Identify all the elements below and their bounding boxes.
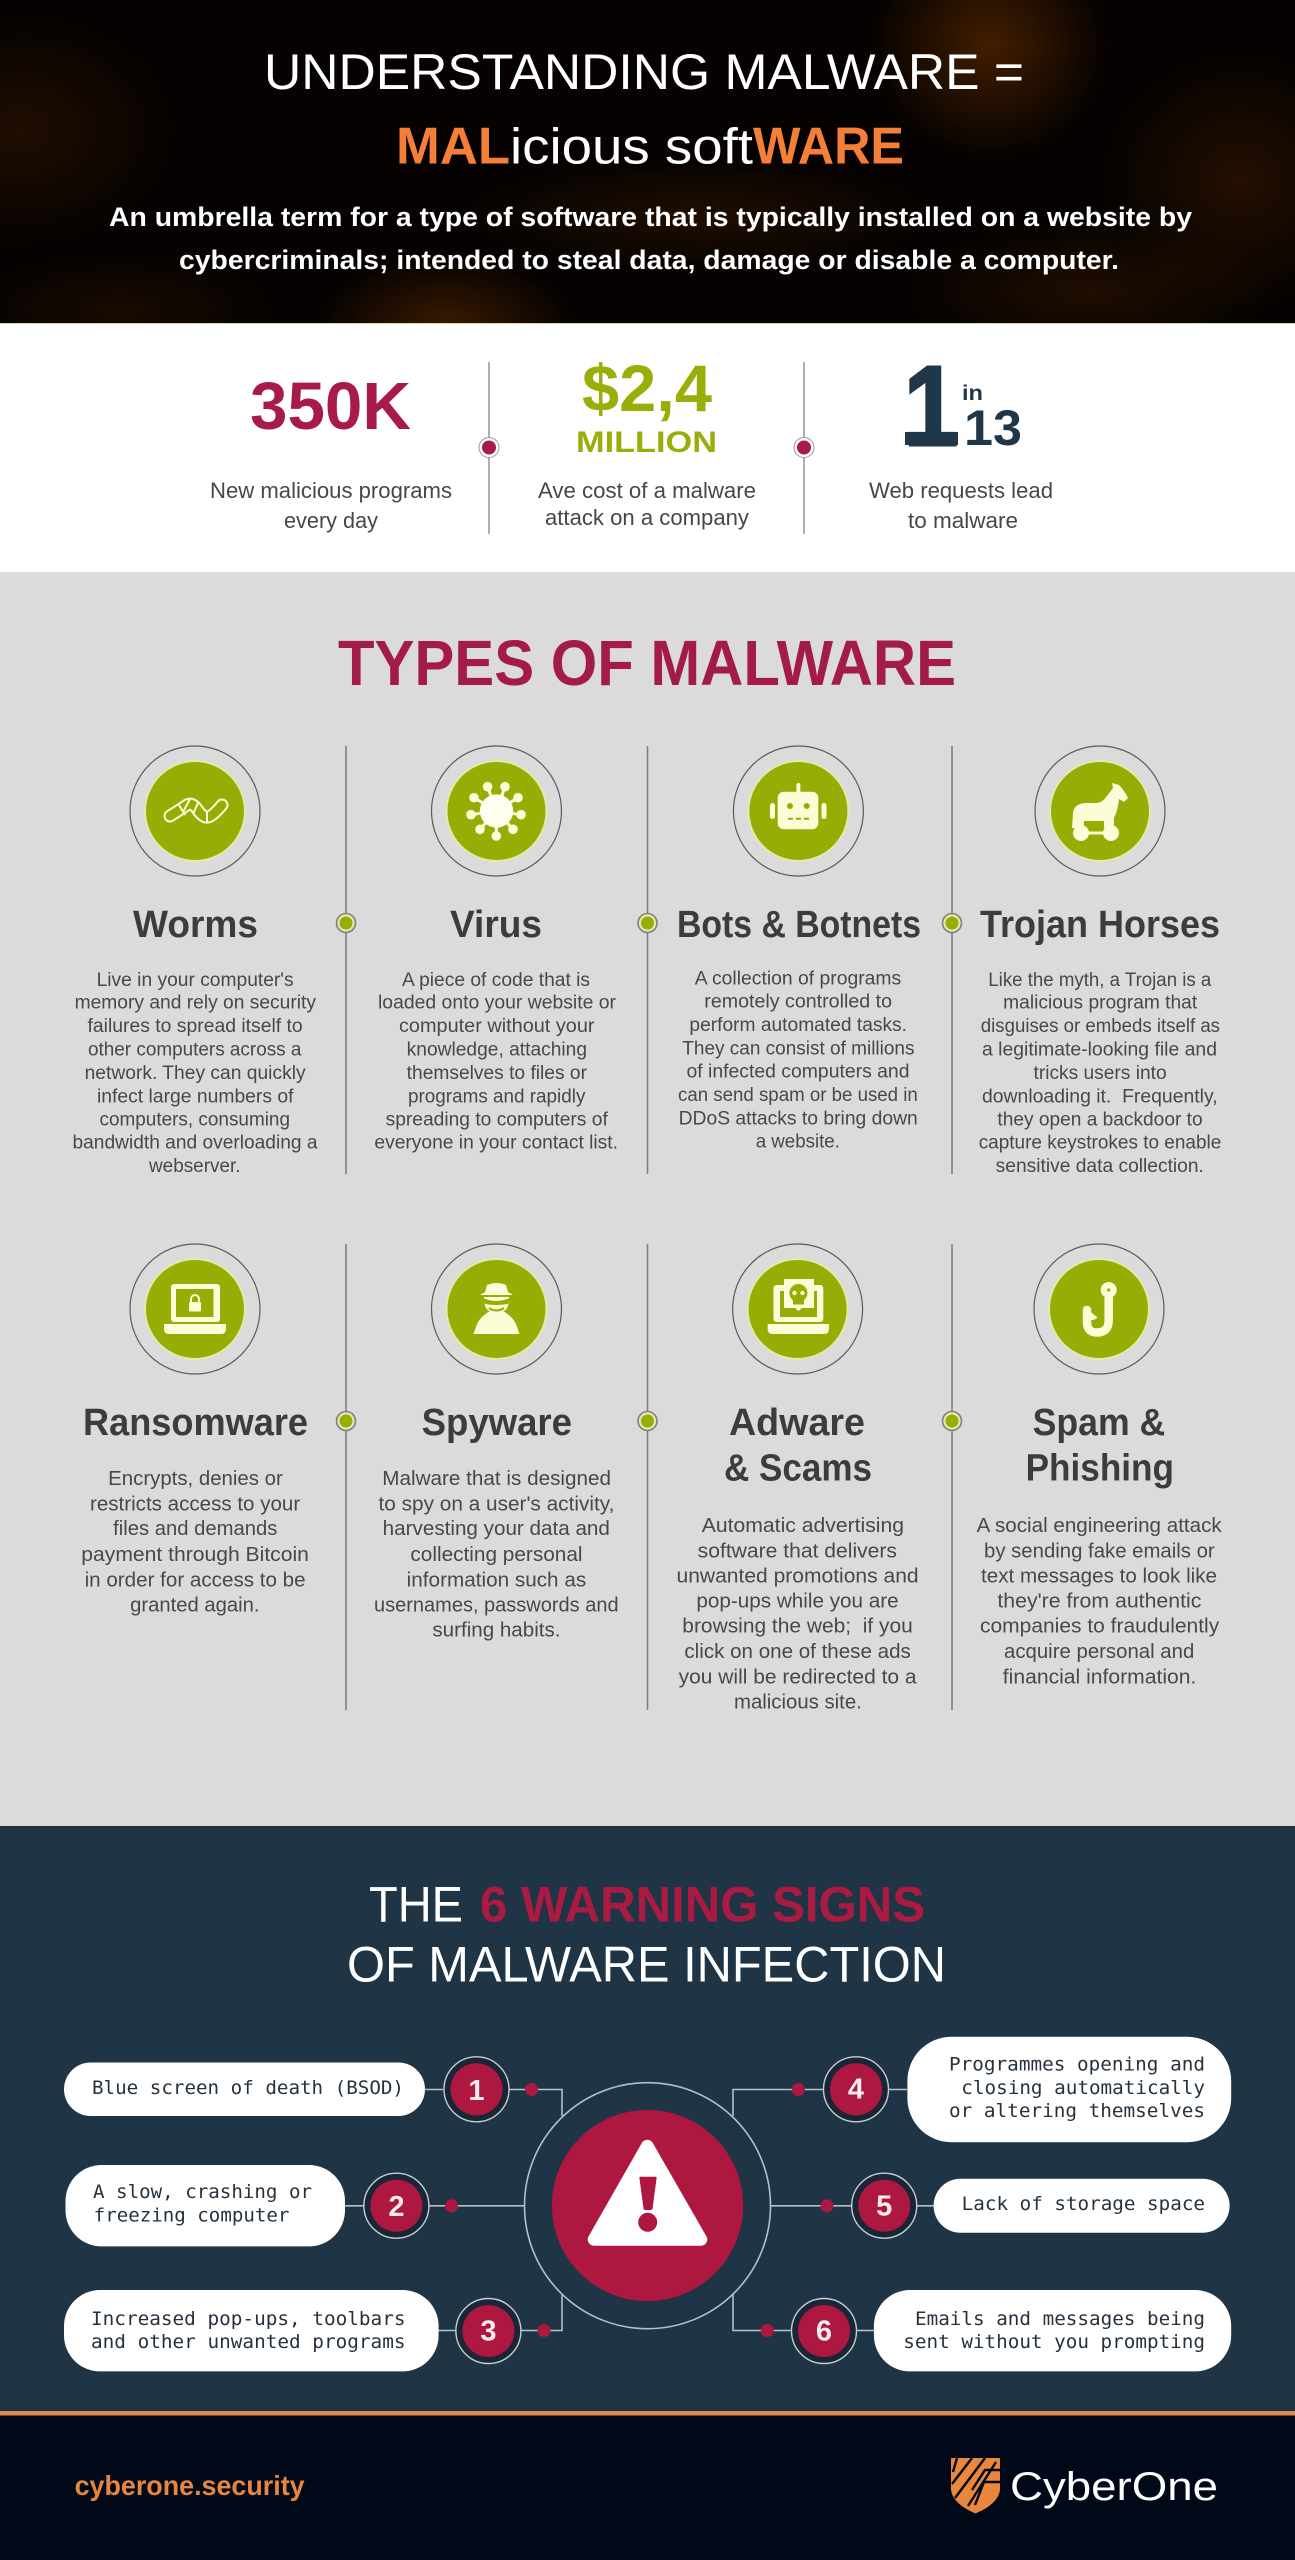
footer panel bbox=[0, 2411, 1295, 2560]
description: collecting personal bbox=[410, 1544, 582, 1566]
description: usernames, passwords and bbox=[374, 1595, 619, 1617]
types of malware panel bbox=[0, 572, 1295, 1826]
warning sign 3: 3 bbox=[480, 2315, 496, 2347]
card: trojan horses bbox=[979, 746, 1221, 1177]
description: they're from authentic bbox=[997, 1590, 1201, 1612]
description: DDoS attacks to bring down bbox=[679, 1108, 918, 1129]
description: memory and rely on security bbox=[75, 993, 316, 1014]
header panel bbox=[0, 0, 1295, 395]
subtitle bbox=[109, 202, 1192, 275]
description: can send spam or be used in bbox=[678, 1085, 918, 1106]
description: software that delivers bbox=[698, 1540, 897, 1562]
heading: Phishing bbox=[1026, 1448, 1174, 1490]
description: They can consist of millions bbox=[682, 1038, 914, 1059]
description: other computers across a bbox=[88, 1039, 302, 1060]
card: bots and botnets bbox=[677, 746, 921, 1153]
icon: spy bbox=[432, 1244, 562, 1374]
description: computer without your bbox=[399, 1016, 595, 1037]
stat divider 1 bbox=[479, 362, 499, 534]
description: financial information. bbox=[1003, 1666, 1196, 1688]
warning sign 5: Lack of storage space bbox=[962, 2193, 1205, 2215]
heading: Worms bbox=[133, 904, 258, 946]
heading: Ransomware bbox=[83, 1402, 308, 1444]
description: tricks users into bbox=[1034, 1063, 1167, 1084]
title line 2: MAL bbox=[396, 118, 510, 176]
description: network. They can quickly bbox=[85, 1063, 306, 1084]
description: a legitimate-looking file and bbox=[982, 1039, 1217, 1060]
stat divider 2 bbox=[794, 362, 814, 534]
warning sign 3 bbox=[64, 2290, 550, 2371]
stat: 350K: 350K bbox=[250, 369, 411, 444]
icon: locked laptop bbox=[130, 1244, 260, 1374]
section heading: TYPES OF MALWARE bbox=[338, 627, 956, 699]
description: acquire personal and bbox=[1004, 1641, 1194, 1663]
description: browsing the web; if you bbox=[682, 1616, 913, 1638]
description: sensitive data collection. bbox=[996, 1156, 1204, 1177]
description: Like the myth, a Trojan is a bbox=[988, 970, 1212, 991]
warning sign 4: Programmes opening and bbox=[949, 2054, 1205, 2076]
description: information such as bbox=[407, 1569, 586, 1591]
icon: virus bbox=[432, 746, 562, 876]
description: of infected computers and bbox=[686, 1062, 910, 1083]
icon: fish hook bbox=[1034, 1244, 1164, 1374]
section heading: 6 WARNING SIGNS bbox=[480, 1876, 925, 1932]
subtitle: cybercriminals; intended to steal data, damage or disable a computer. bbox=[179, 245, 1119, 275]
description: downloading it. Frequently, bbox=[982, 1086, 1218, 1107]
card: worms bbox=[72, 746, 318, 1177]
description: disguises or embeds itself as bbox=[981, 1016, 1220, 1037]
description: loaded onto your website or bbox=[378, 993, 617, 1014]
stat: $2,4 million: attack on a company bbox=[545, 505, 749, 530]
description: harvesting your data and bbox=[383, 1518, 610, 1540]
card: adware and scams bbox=[676, 1244, 919, 1714]
description: capture keystrokes to enable bbox=[979, 1133, 1221, 1154]
warning sign 1: Blue screen of death (BSOD) bbox=[92, 2077, 404, 2099]
warning sign 6: Emails and messages being bbox=[915, 2308, 1205, 2330]
description: by sending fake emails or bbox=[984, 1540, 1215, 1562]
description: bandwidth and overloading a bbox=[72, 1133, 318, 1154]
description: computers, consuming bbox=[100, 1109, 290, 1130]
warning sign 6: 6 bbox=[816, 2315, 832, 2347]
description: malicious site. bbox=[734, 1692, 862, 1714]
section heading: OF MALWARE INFECTION bbox=[347, 1937, 946, 1993]
warning sign 1: 1 bbox=[468, 2075, 485, 2107]
description bbox=[678, 968, 918, 1153]
description bbox=[676, 1515, 919, 1714]
icon: skull laptop bbox=[733, 1244, 863, 1374]
description: Live in your computer's bbox=[97, 970, 294, 991]
card: spam and phishing bbox=[977, 1244, 1223, 1688]
stat: 1 in 13: 1 bbox=[904, 343, 958, 469]
description bbox=[374, 1468, 619, 1641]
title line 2 bbox=[396, 118, 904, 176]
warning sign 1 bbox=[64, 2057, 538, 2122]
warning sign 6 bbox=[761, 2290, 1231, 2371]
description: knowledge, attaching bbox=[407, 1039, 587, 1060]
description: click on one of these ads bbox=[684, 1641, 911, 1663]
dividers row 2 bbox=[336, 1244, 962, 1710]
description: files and demands bbox=[113, 1518, 277, 1540]
title line 1: UNDERSTANDING MALWARE = bbox=[264, 44, 1024, 100]
stat: $2,4 million: MILLION bbox=[576, 426, 717, 459]
warning sign 2 bbox=[66, 2165, 458, 2246]
stat: 350K: every day bbox=[284, 508, 378, 533]
description bbox=[374, 970, 618, 1154]
warning sign 4 bbox=[792, 2037, 1231, 2142]
warning sign 2: freezing computer bbox=[94, 2205, 289, 2227]
description bbox=[72, 970, 318, 1177]
description: programs and rapidly bbox=[408, 1086, 586, 1107]
dividers row 1 bbox=[336, 746, 962, 1174]
warning sign 3: Increased pop-ups, toolbars bbox=[91, 2308, 406, 2330]
description: pop-ups while you are bbox=[696, 1590, 899, 1612]
logo: CyberOne: CyberOne bbox=[1010, 2465, 1218, 2509]
description: everyone in your contact list. bbox=[374, 1133, 618, 1154]
description: restricts access to your bbox=[90, 1493, 301, 1515]
warning sign 4: 4 bbox=[848, 2074, 864, 2106]
description bbox=[979, 970, 1221, 1177]
description: themselves to files or bbox=[407, 1063, 588, 1084]
description: in order for access to be bbox=[85, 1569, 306, 1591]
stat: 1 in 13 bbox=[869, 343, 1053, 533]
card: spyware bbox=[374, 1244, 619, 1641]
heading: Spyware bbox=[422, 1402, 572, 1444]
title line 2: WARE bbox=[753, 118, 904, 176]
heading: Adware bbox=[729, 1402, 865, 1444]
description: spreading to computers of bbox=[386, 1109, 609, 1130]
warning sign 2: A slow, crashing or bbox=[93, 2181, 312, 2203]
heading: Virus bbox=[450, 904, 542, 946]
section heading bbox=[347, 1876, 946, 1993]
heading: & Scams bbox=[724, 1448, 872, 1490]
description: perform automated tasks. bbox=[689, 1015, 907, 1036]
description: Malware that is designed bbox=[382, 1468, 611, 1490]
description: A social engineering attack bbox=[977, 1515, 1223, 1537]
heading: Bots & Botnets bbox=[677, 904, 921, 946]
warning signs panel bbox=[0, 1826, 1295, 2411]
warning sign 6: sent without you prompting bbox=[903, 2331, 1205, 2353]
stat: 1 in 13: in bbox=[962, 382, 983, 405]
card: ransomware bbox=[81, 1244, 309, 1617]
description: they open a backdoor to bbox=[997, 1109, 1203, 1130]
icon: trojan horse bbox=[1035, 746, 1165, 876]
connector lines bbox=[345, 2090, 934, 2330]
warning sign 2: 2 bbox=[388, 2191, 404, 2223]
description: a website. bbox=[756, 1132, 840, 1153]
description: surfing habits. bbox=[432, 1619, 560, 1641]
heading bbox=[724, 1402, 872, 1490]
description bbox=[81, 1468, 309, 1617]
description: you will be redirected to a bbox=[679, 1666, 918, 1688]
heading: Spam & bbox=[1033, 1402, 1165, 1444]
stat: 1 in 13: 13 bbox=[964, 400, 1022, 456]
description: payment through Bitcoin bbox=[81, 1544, 309, 1566]
description: webserver. bbox=[148, 1156, 240, 1177]
stat: 350K bbox=[210, 369, 452, 533]
stat: $2,4 million: Ave cost of a malware bbox=[538, 478, 756, 503]
statistics panel bbox=[0, 324, 1295, 572]
description: to spy on a user's activity, bbox=[378, 1493, 614, 1515]
description: granted again. bbox=[130, 1595, 260, 1617]
heading bbox=[1026, 1402, 1174, 1490]
central warning icon bbox=[524, 2083, 770, 2329]
warning sign 4: or altering themselves bbox=[949, 2100, 1205, 2122]
title line 2: icious soft bbox=[510, 118, 753, 174]
warning sign 3: and other unwanted programs bbox=[91, 2331, 406, 2353]
stat: $2,4 million: $2,4 bbox=[582, 351, 712, 425]
warning sign 4: closing automatically bbox=[961, 2077, 1205, 2099]
description bbox=[977, 1515, 1223, 1688]
logo: CyberOne bbox=[951, 2458, 1218, 2514]
description: unwanted promotions and bbox=[676, 1566, 919, 1588]
description: infect large numbers of bbox=[97, 1086, 294, 1107]
description: Automatic advertising bbox=[702, 1515, 904, 1537]
icon: worm bbox=[130, 746, 260, 876]
heading: Trojan Horses bbox=[980, 904, 1220, 946]
section heading: THE bbox=[369, 1876, 463, 1932]
stat: $2,4 million bbox=[538, 351, 756, 530]
description: failures to spread itself to bbox=[88, 1016, 303, 1037]
description: malicious program that bbox=[1003, 993, 1198, 1014]
subtitle: An umbrella term for a type of software that is typically installed on a website by bbox=[109, 202, 1192, 232]
icon: robot bbox=[733, 746, 863, 876]
description: Encrypts, denies or bbox=[108, 1468, 283, 1490]
stat: 1 in 13: to malware bbox=[908, 508, 1018, 533]
description: remotely controlled to bbox=[704, 992, 892, 1013]
description: A collection of programs bbox=[695, 968, 901, 989]
description: A piece of code that is bbox=[402, 970, 590, 991]
stat: 1 in 13: Web requests lead bbox=[869, 478, 1053, 503]
warning sign 5 bbox=[820, 2173, 1230, 2238]
website address: cyberone.security bbox=[75, 2470, 305, 2501]
description: text messages to look like bbox=[981, 1566, 1217, 1588]
stat: 350K: New malicious programs bbox=[210, 478, 452, 503]
card: virus bbox=[374, 746, 618, 1154]
description: companies to fraudulently bbox=[980, 1616, 1219, 1638]
warning sign 5: 5 bbox=[876, 2190, 892, 2222]
